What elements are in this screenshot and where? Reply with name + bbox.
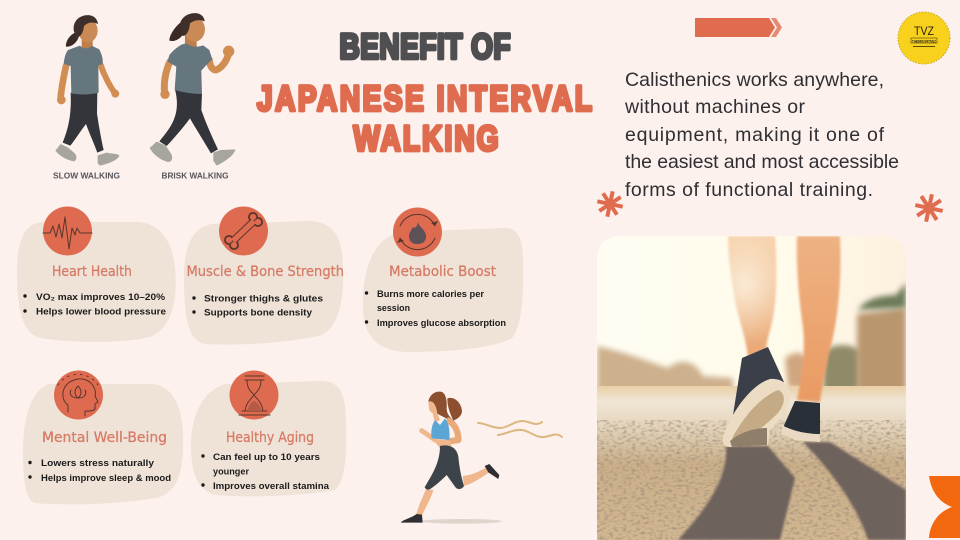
- bullet list: Lowers stress naturally: [41, 458, 155, 469]
- right shoe: [784, 401, 820, 434]
- bullet list: Improves glucose absorption: [377, 318, 506, 329]
- card background: [184, 221, 343, 345]
- bullet list: [365, 289, 506, 329]
- heading: Healthy Aging: [226, 430, 314, 446]
- bullet list: Can feel up to 10 years: [213, 452, 320, 463]
- left shoe: [733, 347, 784, 415]
- bullet list: Burns more calories per: [377, 289, 484, 300]
- panel: muscle and bone strength: [184, 206, 344, 345]
- text block: calisthenics description: without machines or: [624, 96, 806, 118]
- bullet list: younger: [213, 466, 249, 478]
- icon: bone: [219, 206, 268, 256]
- heading: Metabolic Boost: [389, 264, 496, 280]
- bullet list: Supports bone density: [204, 308, 313, 318]
- title: JAPANESE INTERVAL: [257, 78, 592, 118]
- bullet list: [28, 458, 171, 484]
- bullet list: Helps lower blood pressure: [36, 306, 166, 318]
- background foot and bushes right: [785, 353, 808, 388]
- illustration: running woman: [401, 392, 502, 524]
- shadows: [678, 446, 795, 540]
- card background: [191, 381, 346, 496]
- decoration: asterisk right: [912, 191, 946, 225]
- caption: slow walking: SLOW WALKING: [53, 170, 120, 180]
- panel: mental well-being: [23, 370, 183, 504]
- decoration: asterisk left: [595, 189, 625, 219]
- icon: heartbeat: [43, 206, 92, 256]
- bullet list: session: [377, 303, 410, 314]
- bullet list: [201, 452, 330, 492]
- illustration: slow walking figure: [55, 15, 119, 166]
- bullet list: [192, 294, 323, 318]
- heading: Mental Well-Being: [42, 430, 167, 446]
- logo: TVZ: [914, 24, 934, 38]
- icon: metabolic cycle with flame: [393, 208, 442, 256]
- card background: [363, 228, 523, 352]
- text block: calisthenics description: forms of functional training.: [625, 179, 873, 201]
- right leg: [797, 236, 841, 402]
- text block: calisthenics description: equipment, making it one of: [625, 124, 885, 146]
- left leg: [728, 236, 776, 358]
- icon: head with lotus: [54, 370, 103, 420]
- panel: heart health: [17, 206, 176, 342]
- sun glow: [728, 237, 777, 338]
- tree line left: [597, 346, 733, 392]
- heading: Heart Health: [52, 264, 132, 280]
- decoration: orange corner shape: [929, 476, 960, 538]
- icon: hourglass: [230, 370, 278, 420]
- text block: calisthenics description: [624, 69, 899, 201]
- decoration: motion waves: [478, 421, 562, 437]
- logo: THEINNOVATIVEZ: [912, 38, 936, 43]
- arrow banner: [695, 18, 782, 37]
- photo: walking feet on road: [597, 225, 906, 540]
- bullet list: Helps improve sleep & mood: [41, 473, 171, 484]
- title: WALKING: [354, 118, 498, 158]
- bullet list: VO₂ max improves 10–20%: [36, 292, 166, 303]
- road: [597, 386, 906, 540]
- text block: calisthenics description: Calisthenics works anywhere,: [625, 69, 884, 91]
- logo: [898, 12, 950, 64]
- panel: metabolic boost: [363, 208, 523, 352]
- bullet list: Stronger thighs & glutes: [204, 294, 323, 304]
- heading: Muscle & Bone Strength: [186, 264, 344, 280]
- card background: [23, 384, 183, 504]
- illustration: brisk walking figure: [150, 13, 235, 166]
- title: [257, 26, 592, 158]
- card background: [17, 222, 176, 342]
- panel: healthy aging: [191, 370, 346, 496]
- bullet list: [23, 292, 166, 318]
- bullet list: Improves overall stamina: [213, 481, 330, 492]
- caption: brisk walking: BRISK WALKING: [162, 170, 229, 180]
- text block: calisthenics description: the easiest and most accessible: [625, 151, 899, 173]
- title: BENEFIT OF: [340, 26, 511, 66]
